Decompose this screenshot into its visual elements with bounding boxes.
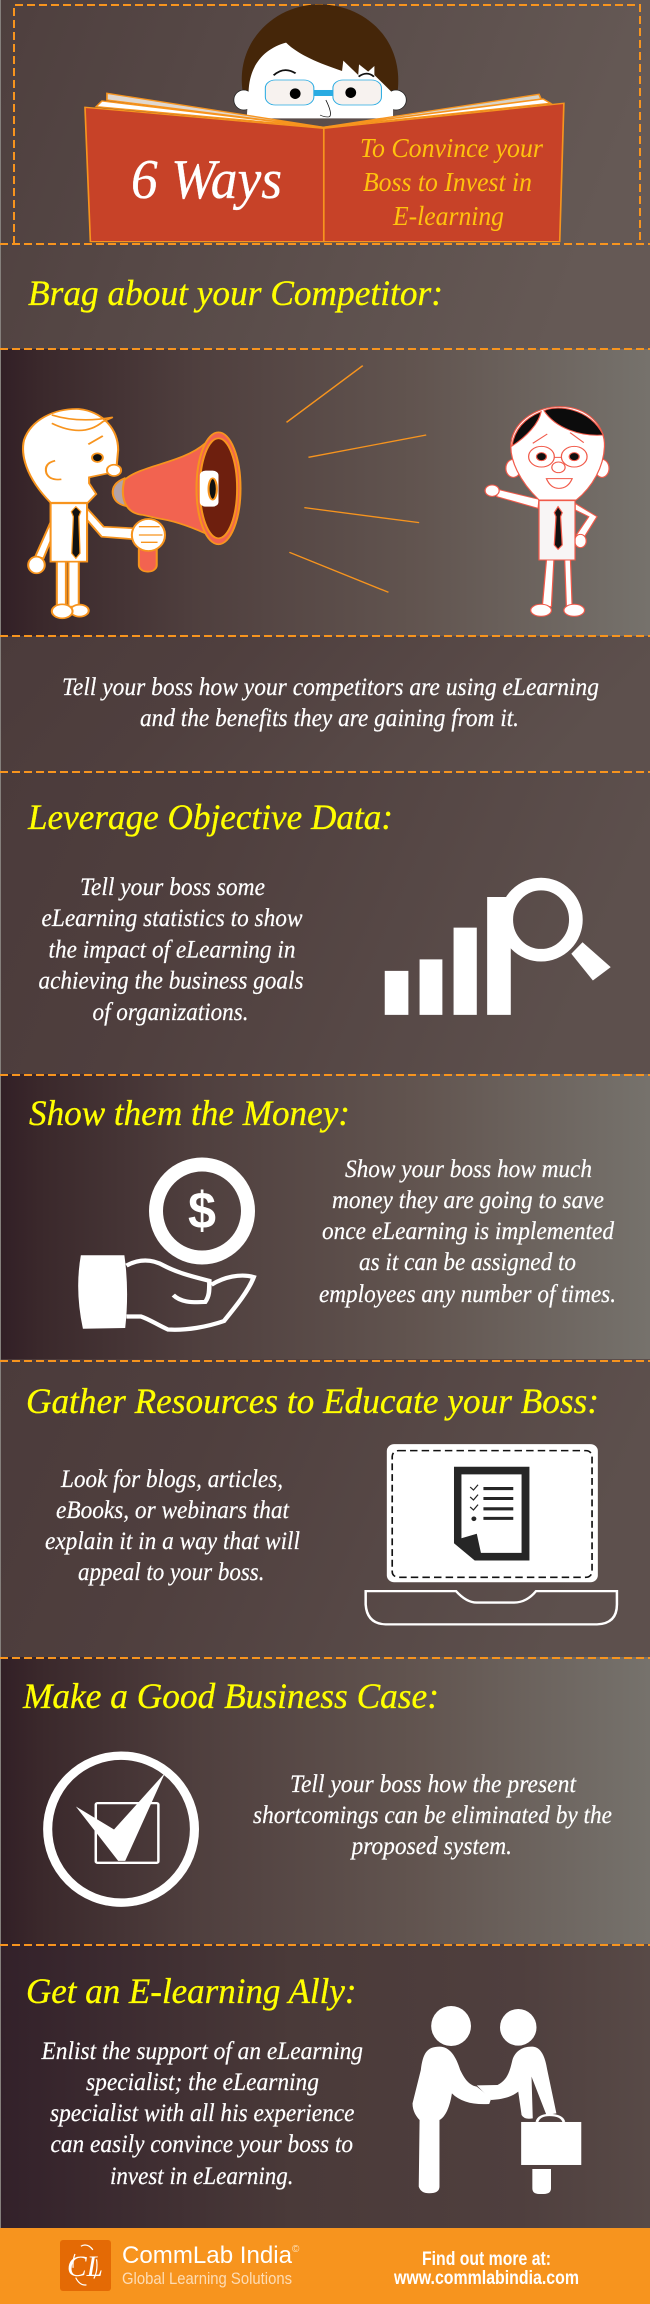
magnifier handle [571, 942, 611, 980]
hair [242, 4, 398, 95]
text: resources: Look for blogs, articles, [60, 1466, 283, 1493]
book subtitle: E-learning [392, 201, 504, 231]
laptop screen [387, 1444, 598, 1582]
text: competitor description: Tell your boss how your competitors are using eLearning [62, 674, 599, 701]
panel: objective data band [0, 772, 650, 1074]
text: business case: proposed system. [350, 1833, 512, 1860]
logo: CommLab mark [60, 2240, 111, 2291]
text: money: Show your boss how much [345, 1156, 592, 1183]
ears [234, 90, 406, 110]
illustration: man with megaphone [23, 409, 240, 618]
footer call to action: Find out more at: [422, 2249, 551, 2270]
text: business case: shortcomings can be eliminated by the [253, 1802, 612, 1829]
icon: checkbox in circle [48, 1756, 194, 1903]
heading: competitor: Brag about your Competitor: [28, 273, 443, 313]
magnifier lens [506, 884, 576, 955]
face [247, 43, 393, 118]
megaphone [113, 432, 240, 572]
eyebrows [274, 70, 374, 77]
text: objective data: of organizations. [92, 999, 248, 1026]
text: objective data: Tell your boss some [80, 874, 265, 901]
text: money: money they are going to save [332, 1187, 604, 1214]
arms [497, 489, 597, 537]
glasses [265, 80, 381, 105]
text: ally: invest in eLearning. [110, 2163, 294, 2190]
heading: resources: Gather Resources to Educate your Boss: [26, 1381, 599, 1421]
book subtitle: Boss to Invest in [363, 167, 532, 197]
text: objective data: achieving the business goals [38, 968, 304, 994]
text: ally: can easily convince your boss to [50, 2131, 353, 2158]
text: resources: explain it in a way that will [45, 1528, 300, 1555]
logo: tagline: Global Learning Solutions [122, 2269, 292, 2288]
text: objective data: the impact of eLearning in [48, 936, 296, 964]
cuff [78, 1255, 127, 1329]
right person [477, 2009, 556, 2194]
eyes [290, 87, 356, 99]
text: money [319, 1156, 616, 1308]
book pages [96, 93, 551, 127]
head [511, 407, 605, 500]
box [96, 1803, 158, 1863]
illustration: boy reading book [85, 4, 564, 242]
book subtitle: To Convince your [360, 133, 543, 163]
text: objective data: eLearning statistics to show [42, 905, 303, 932]
briefcase [521, 2115, 581, 2165]
text: resources [45, 1466, 300, 1586]
text: ally: specialist with all his experience [50, 2100, 354, 2127]
glasses and face [529, 433, 587, 488]
hand outline [126, 1261, 254, 1330]
tick [76, 1773, 165, 1861]
text: competitor description [62, 674, 599, 732]
checklist items [470, 1485, 513, 1520]
body and tie [28, 503, 135, 618]
nose [320, 100, 330, 117]
footer call to action [393, 2249, 579, 2289]
torso [539, 501, 575, 560]
hair [512, 408, 603, 446]
laptop base [366, 1591, 617, 1624]
text: money: as it can be assigned to [359, 1249, 576, 1276]
panel: header band [0, 0, 650, 349]
panel: ally band [0, 1944, 650, 2229]
icon: hand holding coin [78, 1164, 254, 1330]
ears [506, 459, 609, 477]
coin ring [156, 1164, 248, 1258]
text: ally: Enlist the support of an eLearning [41, 2038, 363, 2065]
text: money: employees any number of times. [319, 1281, 616, 1308]
text: money: once eLearning is implemented [322, 1218, 614, 1245]
text: objective data [38, 874, 304, 1026]
bars [385, 897, 511, 1015]
panel: resources band [0, 1359, 650, 1657]
text: resources: appeal to your boss. [78, 1559, 264, 1586]
heading: ally: Get an E-learning Ally: [26, 1971, 356, 2011]
hands [485, 485, 586, 548]
logo: CommLab name: CommLab India [122, 2242, 293, 2269]
logo: copyright: © [292, 2244, 300, 2255]
heading: objective data: Leverage Objective Data: [27, 797, 393, 837]
dollar sign: $ [188, 1182, 216, 1240]
icon: handshake with briefcase [413, 2006, 581, 2194]
book title: 6 Ways [131, 149, 282, 211]
icon: bar chart with magnifier [385, 884, 611, 1015]
heading: business case: Make a Good Business Case: [22, 1676, 439, 1716]
panel: business case band [0, 1657, 650, 1944]
panel: money band [0, 1074, 650, 1359]
sound rays [286, 366, 426, 592]
checklist document [454, 1467, 529, 1560]
text: business case [253, 1771, 612, 1860]
left person [413, 2006, 491, 2193]
panel: footer [0, 2228, 650, 2304]
book subtitle [360, 133, 543, 231]
dashed screen border [392, 1451, 592, 1577]
text: ally [41, 2038, 363, 2190]
text: resources: eBooks, or webinars that [56, 1497, 290, 1524]
heading: money: Show them the Money: [29, 1093, 350, 1133]
icon: laptop with checklist [366, 1444, 617, 1624]
text: competitor description: and the benefits they are gaining from it. [140, 705, 519, 732]
panel: competitor illustration band [0, 349, 650, 636]
text: business case: Tell your boss how the present [290, 1771, 577, 1798]
panel: competitor description band [0, 636, 650, 772]
text: ally: specialist; the eLearning [86, 2069, 319, 2096]
illustration: boss [485, 407, 609, 616]
book covers [85, 103, 564, 242]
logo: CommLab mark: CL [67, 2250, 103, 2283]
legs and feet [542, 560, 572, 607]
head [23, 409, 121, 503]
ring [48, 1756, 194, 1903]
hand [78, 1255, 254, 1330]
footer call to action: www.commlabindia.com [393, 2268, 579, 2289]
tie [554, 507, 562, 549]
